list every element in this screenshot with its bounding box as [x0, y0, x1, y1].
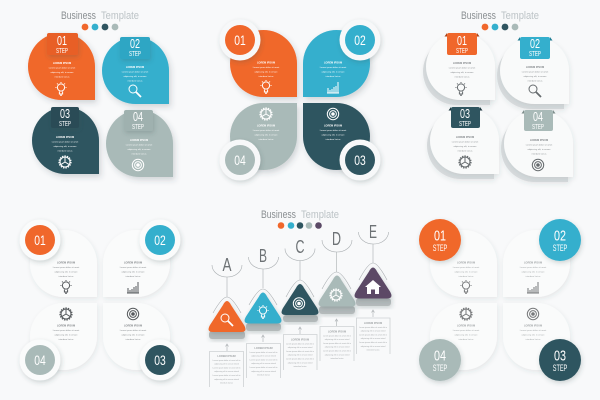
petal: 03 step: 03	[554, 348, 566, 364]
card: step 01: adipiscing elit, in ornare	[51, 71, 74, 74]
card: step 01: STEP	[56, 46, 68, 55]
card: white step 03: LOREM IPSUM	[456, 135, 474, 139]
card: step 04: STEP	[132, 122, 144, 131]
petal: 02: LOREM IPSUM	[124, 260, 142, 264]
card: white step 02: 02	[530, 36, 540, 51]
card: step 04: adipiscing elit, in ornare	[128, 148, 151, 151]
step A	[209, 255, 245, 387]
step B: Lorem ipsum dolor sit amet elit in	[250, 351, 277, 354]
petal: 02: 02	[154, 232, 166, 248]
step E	[355, 222, 391, 354]
card: step 02	[102, 36, 169, 104]
step A: Lorem ipsum dolor sit amet elit in	[213, 359, 240, 362]
heading: panel 1 title: Business	[61, 10, 96, 22]
petal: 03 step: Lorem ipsum dolor sit amet	[520, 329, 547, 332]
petal: 02 step: LOREM IPSUM	[524, 260, 542, 264]
step A: Lorem ipsum dolor sit amet elit in	[213, 366, 240, 369]
card: white step 03: STEP	[459, 119, 471, 128]
petal: 04 step: LOREM IPSUM	[457, 324, 475, 328]
card: step 03: 03	[60, 106, 70, 121]
card: white step 01: adipiscing elit, in ornare	[451, 71, 474, 74]
card: white step 04	[501, 109, 573, 182]
petal: 02: LOREM IPSUM	[324, 60, 342, 64]
step C: Lorem ipsum dolor sit amet elit in	[286, 350, 314, 353]
heading: panel 3 title: Template	[501, 10, 539, 22]
card: step 01: LOREM IPSUM	[53, 61, 71, 65]
step D: adipiscing elit in ornare interd	[325, 353, 349, 356]
petal: 02 step: adipiscing elit, in ornare	[522, 270, 545, 274]
petal: 03 step: STEP	[553, 363, 567, 373]
step D: Lorem ipsum dolor sit amet elit in	[323, 342, 351, 345]
petal: 02: adipiscing elit, in ornare	[122, 270, 145, 274]
step D	[319, 229, 355, 361]
petal: 01 step: STEP	[433, 243, 447, 253]
step B: interdum luctus	[257, 374, 270, 377]
step B: adipiscing elit in ornare interd	[251, 370, 276, 373]
step D: Lorem ipsum dolor sit amet elit in	[323, 334, 351, 337]
card: white step 03: 03	[460, 106, 470, 121]
heading: staircase title	[261, 209, 339, 221]
petal: 01: interdum luctus	[59, 275, 74, 278]
step E: adipiscing elit in ornare interd	[361, 337, 385, 340]
petal: 03: 03	[354, 152, 366, 168]
petal: 02: Lorem ipsum dolor sit amet	[320, 66, 347, 69]
petal: 03: interdum luctus	[126, 338, 141, 341]
card: step 03: adipiscing elit, in ornare	[54, 145, 77, 148]
step C: Lorem ipsum dolor sit amet elit in	[286, 342, 314, 345]
heading: staircase title: Template	[301, 209, 339, 221]
petal: 02: 02	[354, 32, 366, 48]
step B: adipiscing elit in ornare interd	[251, 362, 276, 365]
petal: 04: LOREM IPSUM	[257, 124, 275, 128]
step D: adipiscing elit in ornare interd	[325, 338, 349, 341]
step D: Lorem ipsum dolor sit amet elit in	[323, 350, 351, 352]
petal: 02: interdum luctus	[126, 275, 141, 278]
petal: 03: LOREM IPSUM	[324, 124, 342, 128]
step C: adipiscing elit in ornare interd	[288, 354, 312, 357]
petal: 04: 04	[234, 152, 246, 168]
card: step 04: interdum luctus	[132, 152, 147, 156]
card: white step 03	[427, 106, 499, 179]
step E: E	[369, 222, 377, 242]
step C: C	[296, 237, 304, 257]
step A: interdum luctus	[220, 382, 233, 385]
step B: Lorem ipsum dolor sit amet elit in	[250, 366, 277, 369]
petal: 03 step	[503, 303, 581, 381]
petal: 01 step: adipiscing elit, in ornare	[455, 270, 478, 274]
petal: 01: 01	[34, 232, 46, 248]
petal: 01	[20, 220, 97, 297]
petal: 02: adipiscing elit, in ornare	[322, 70, 345, 74]
card: step 04: Lorem ipsum dolor sit amet	[126, 144, 153, 146]
petal: 04: adipiscing elit, in ornare	[255, 134, 278, 136]
card: white step 02: adipiscing elit, in ornare	[524, 75, 547, 78]
petal: 04: adipiscing elit, in ornare	[55, 334, 78, 336]
petal: 04 step: interdum luctus	[459, 338, 474, 341]
petal: 04 step: STEP	[433, 363, 447, 373]
petal: 04: Lorem ipsum dolor sit amet	[253, 129, 280, 132]
petal: 01: Lorem ipsum dolor sit amet	[53, 266, 80, 269]
card: white step 04: 04	[533, 109, 543, 124]
petal: 03 step: adipiscing elit, in ornare	[522, 334, 545, 336]
card: step 02: adipiscing elit, in ornare	[124, 75, 147, 78]
petal: 03	[303, 103, 380, 180]
step E: adipiscing elit in ornare interd	[361, 330, 385, 333]
petal: 01: 01	[234, 32, 246, 48]
heading: panel 3 title	[461, 10, 539, 22]
card: white step 03: Lorem ipsum dolor sit amet	[452, 140, 479, 144]
card: step 03: STEP	[59, 119, 71, 128]
card: white step 04: adipiscing elit, in ornare	[528, 148, 551, 151]
card: white step 02	[497, 36, 569, 109]
petal: 04	[20, 303, 97, 380]
petal: 04	[220, 103, 297, 180]
card: step 02: interdum luctus	[128, 80, 143, 82]
card: white step 02: STEP	[529, 49, 541, 58]
petal: 01 step	[419, 219, 497, 297]
petal: 04: LOREM IPSUM	[57, 324, 75, 328]
card: white step 01: 01	[457, 33, 467, 48]
panel: top-left coloured step cards	[28, 10, 173, 177]
icon: house	[365, 280, 381, 294]
petal: 04 step: 04	[434, 348, 446, 364]
petal: 04: interdum luctus	[259, 138, 274, 141]
card: white step 01: interdum luctus	[455, 76, 470, 78]
card: white step 02: interdum luctus	[528, 80, 543, 82]
petal: 03	[103, 303, 180, 380]
petal: 03: Lorem ipsum dolor sit amet	[320, 129, 347, 132]
card: step 04	[106, 109, 173, 177]
petal: 01	[220, 20, 297, 97]
card: white step 01: Lorem ipsum dolor sit amet	[449, 66, 476, 70]
legend dots	[482, 24, 518, 30]
petal: 01: LOREM IPSUM	[257, 60, 275, 64]
petal: 01: adipiscing elit, in ornare	[55, 270, 78, 274]
panel: top-centre coloured petals	[220, 20, 380, 180]
card: white step 01: LOREM IPSUM	[453, 61, 471, 65]
petal: 03: adipiscing elit, in ornare	[122, 334, 145, 336]
card: step 03	[32, 106, 99, 174]
petal: 03 step: LOREM IPSUM	[524, 324, 542, 328]
card: step 02: LOREM IPSUM	[126, 65, 144, 69]
step B: Lorem ipsum dolor sit amet elit in	[250, 358, 277, 361]
card: white step 04: LOREM IPSUM	[530, 138, 548, 142]
petal: 04: interdum luctus	[59, 338, 74, 341]
card: step 01: Lorem ipsum dolor sit amet	[49, 66, 76, 70]
petal: 02	[103, 220, 180, 297]
petal: 02 step: 02	[554, 228, 566, 244]
card: white step 02: Lorem ipsum dolor sit amet	[522, 70, 549, 74]
petal: 02 step: Lorem ipsum dolor sit amet	[520, 266, 547, 269]
petal: 04: 04	[34, 352, 46, 368]
step A: adipiscing elit in ornare interd	[214, 363, 239, 366]
panel: top-right white step cards	[423, 10, 573, 182]
card: step 01: 01	[57, 33, 67, 48]
panel: bottom-centre A to E staircase	[209, 209, 391, 387]
petal: 01: Lorem ipsum dolor sit amet	[253, 66, 280, 69]
step C: adipiscing elit in ornare interd	[288, 346, 312, 349]
legend dots	[278, 222, 322, 229]
card: step 01: interdum luctus	[55, 76, 70, 78]
petal: 03: adipiscing elit, in ornare	[322, 134, 345, 136]
step D: adipiscing elit in ornare interd	[325, 346, 349, 349]
petal: 02 step	[503, 219, 581, 297]
step D: D	[332, 229, 341, 249]
heading: staircase title: Business	[261, 209, 296, 221]
step E: LOREM IPSUM	[364, 321, 382, 325]
petal: 01 step: interdum luctus	[459, 275, 474, 278]
petal: 03: Lorem ipsum dolor sit amet	[120, 329, 147, 332]
panel: bottom-left white petals with ringed numbers	[20, 220, 180, 380]
step A: Lorem ipsum dolor sit amet elit in	[213, 374, 240, 377]
petal: 02: interdum luctus	[326, 75, 341, 78]
petal: 01: interdum luctus	[259, 75, 274, 78]
legend dots	[82, 24, 118, 30]
petal: 01: LOREM IPSUM	[57, 260, 75, 264]
petal: 01: adipiscing elit, in ornare	[255, 70, 278, 74]
card: step 04: LOREM IPSUM	[130, 138, 148, 142]
step B: LOREM IPSUM	[254, 346, 273, 350]
step E: Lorem ipsum dolor sit amet elit in	[359, 326, 387, 329]
petal: 04 step: Lorem ipsum dolor sit amet	[453, 329, 480, 332]
petal: 02	[303, 20, 380, 97]
petal: 02 step: STEP	[553, 243, 567, 253]
card: white step 03: interdum luctus	[458, 150, 473, 152]
step B: B	[259, 246, 267, 266]
petal: 03 step: interdum luctus	[526, 338, 541, 341]
card: white step 04: interdum luctus	[532, 152, 547, 156]
heading: panel 1 title	[61, 10, 139, 22]
step A: LOREM IPSUM	[217, 354, 236, 358]
petal: 01 step: 01	[434, 228, 446, 244]
step E: Lorem ipsum dolor sit amet elit in	[359, 341, 387, 344]
petal: 04 step	[419, 303, 497, 381]
card: white step 02: LOREM IPSUM	[526, 65, 544, 69]
step D: LOREM IPSUM	[328, 330, 346, 334]
step D: interdum luctus	[331, 357, 343, 360]
petal: 03: 03	[154, 352, 166, 368]
card: white step 01: STEP	[456, 46, 468, 55]
card: white step 04: STEP	[532, 122, 544, 131]
step E: adipiscing elit in ornare interd	[361, 345, 385, 348]
petal: 04 step: adipiscing elit, in ornare	[455, 334, 478, 336]
step E: interdum luctus	[367, 349, 379, 352]
step A: adipiscing elit in ornare interd	[214, 370, 239, 373]
card: step 03: Lorem ipsum dolor sit amet	[52, 140, 79, 144]
card: step 02: STEP	[129, 49, 141, 58]
step B: adipiscing elit in ornare interd	[251, 355, 276, 358]
step A: A	[222, 255, 232, 275]
card: step 02: Lorem ipsum dolor sit amet	[122, 70, 149, 74]
petal: 02 step: interdum luctus	[526, 275, 541, 278]
step C: adipiscing elit in ornare interd	[288, 361, 312, 364]
heading: panel 3 title: Business	[461, 10, 496, 22]
panel: bottom-right white petals with solid step circles	[419, 219, 581, 381]
petal: 01 step: Lorem ipsum dolor sit amet	[453, 266, 480, 269]
step C: Lorem ipsum dolor sit amet elit in	[286, 358, 314, 360]
step B	[245, 246, 281, 378]
petal: 03: LOREM IPSUM	[124, 324, 142, 328]
card: step 03: interdum luctus	[58, 150, 73, 152]
card: white step 03: adipiscing elit, in ornare	[454, 145, 477, 148]
heading: panel 1 title: Template	[101, 10, 139, 22]
petal: 01 step: LOREM IPSUM	[457, 260, 475, 264]
step C	[282, 237, 318, 370]
card: step 02: 02	[130, 36, 140, 51]
step E: Lorem ipsum dolor sit amet elit in	[359, 333, 387, 336]
card: white step 01	[423, 33, 495, 105]
card: step 01	[28, 33, 95, 100]
card: white step 04: Lorem ipsum dolor sit amet	[526, 144, 553, 146]
card: step 03: LOREM IPSUM	[56, 135, 74, 139]
petal: 02: Lorem ipsum dolor sit amet	[120, 266, 147, 269]
petal: 03: interdum luctus	[326, 138, 341, 141]
step C: LOREM IPSUM	[291, 338, 309, 342]
card: step 04: 04	[133, 109, 143, 124]
step C: interdum luctus	[294, 365, 306, 368]
step A: adipiscing elit in ornare interd	[214, 378, 239, 381]
petal: 04: Lorem ipsum dolor sit amet	[53, 329, 80, 332]
